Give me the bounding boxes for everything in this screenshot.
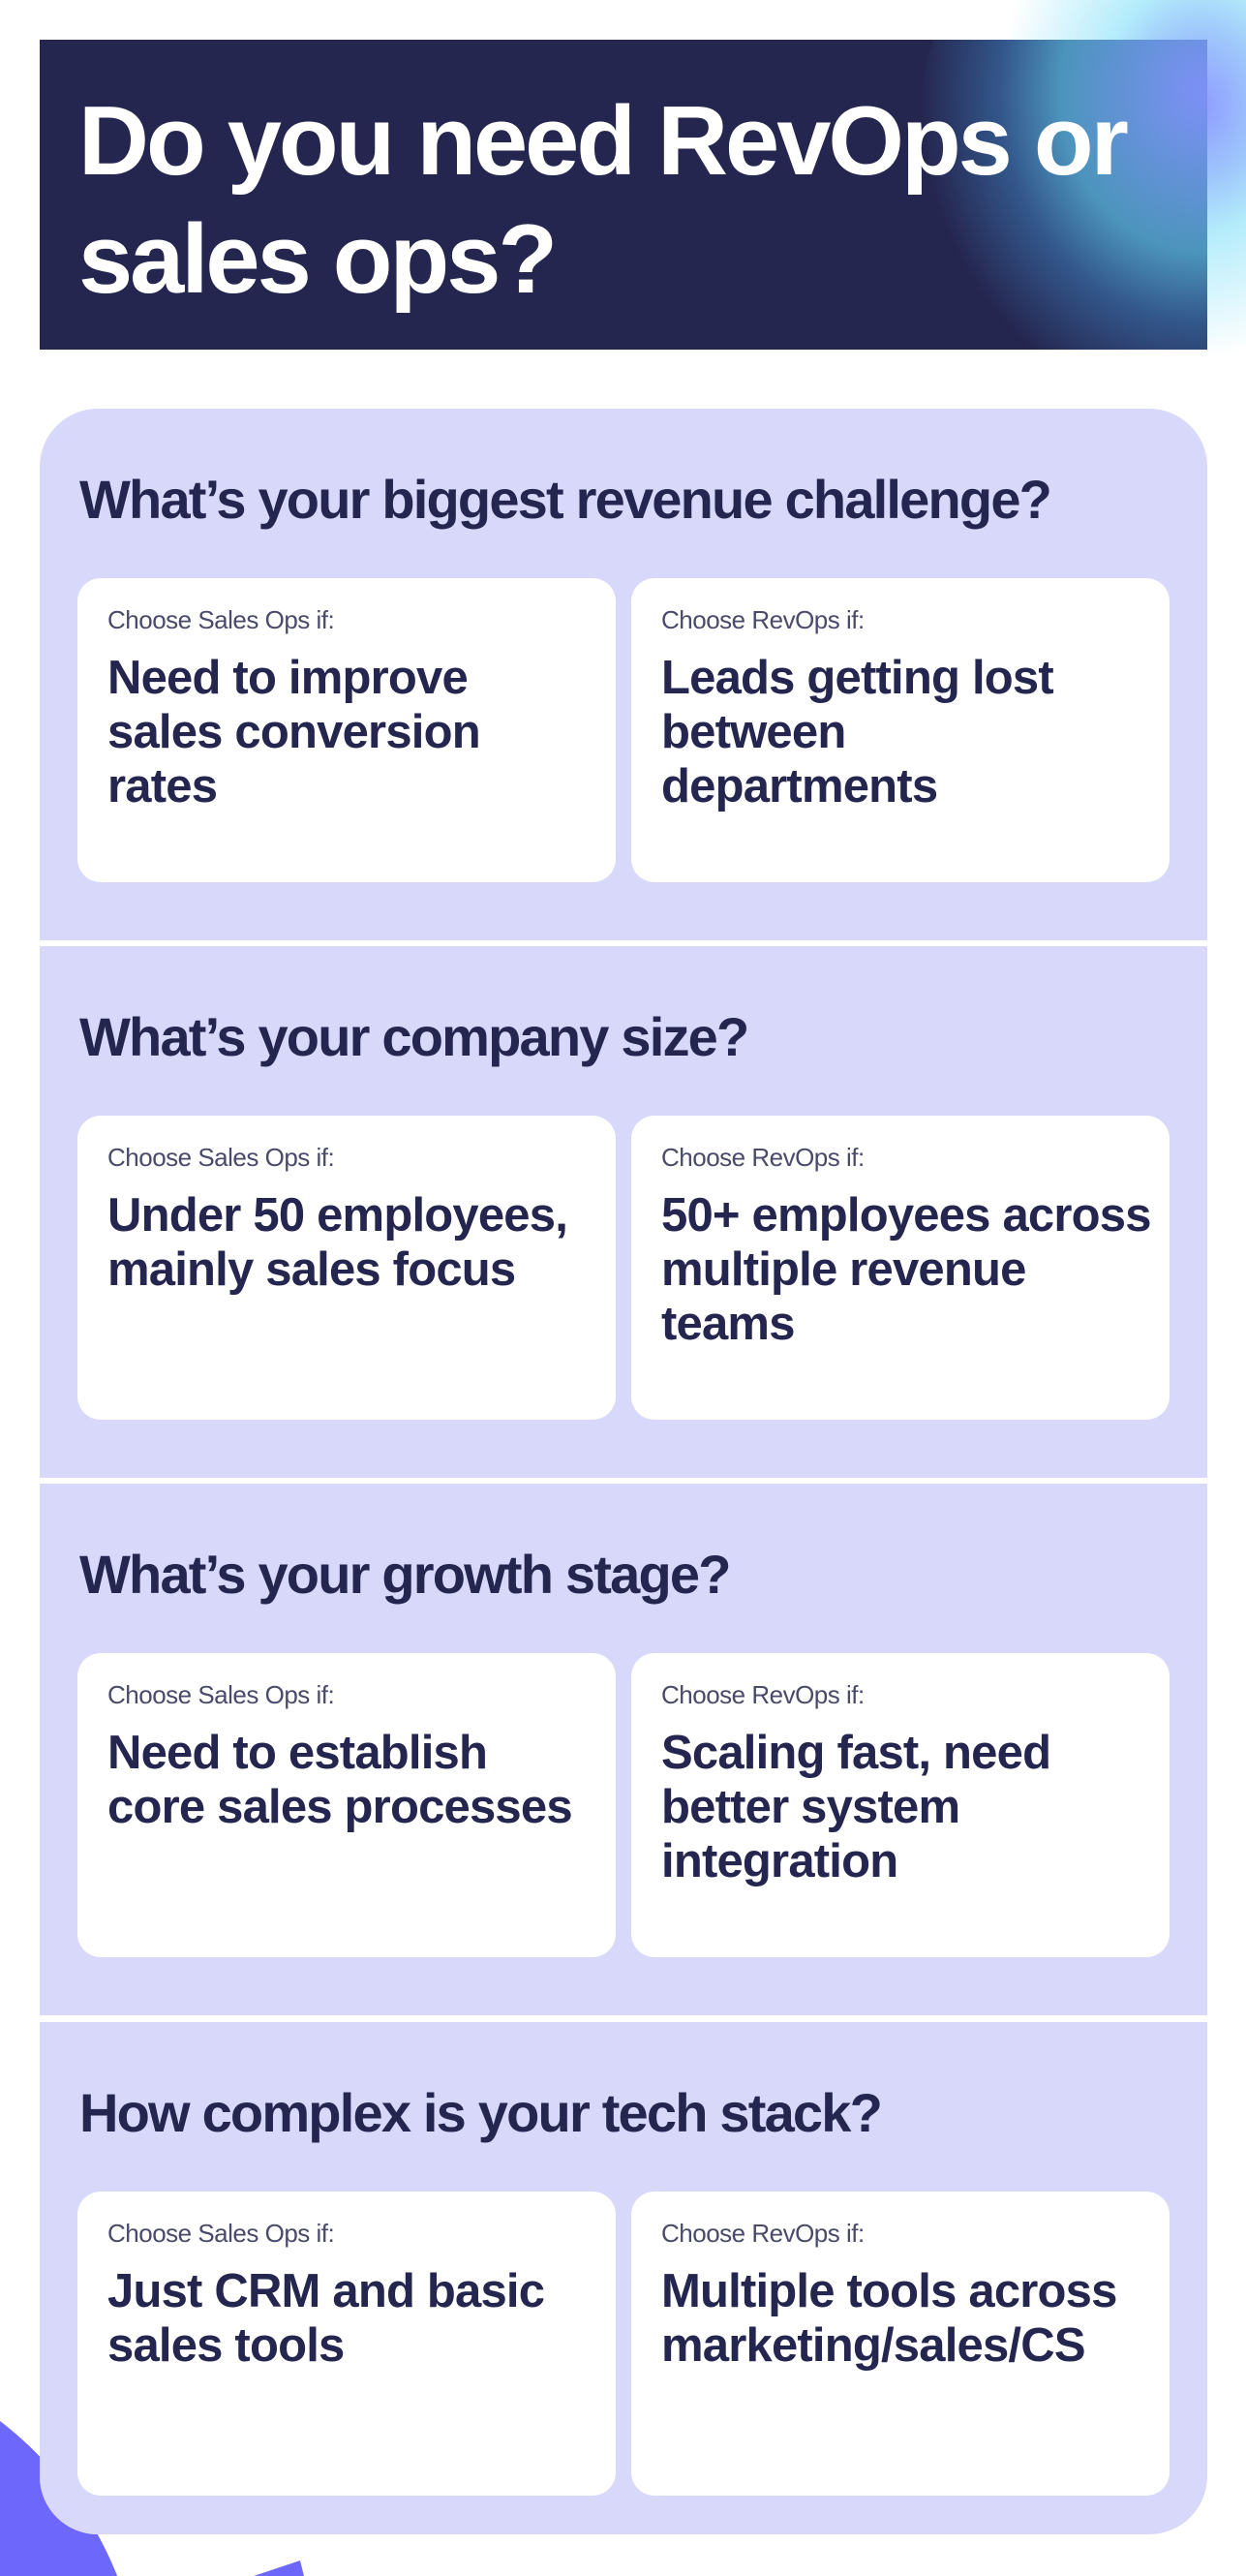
card: sales ops: sales tools [107, 2319, 344, 2372]
card: revops: 50+ employees across [661, 1189, 1151, 1242]
card: revops [631, 1116, 1170, 1420]
card: sales ops: Choose Sales Ops if: [107, 605, 334, 634]
card: sales ops: Need to improve [107, 652, 468, 704]
heading: What’s your growth stage? [79, 1544, 730, 1605]
card: sales ops: rates [107, 760, 217, 813]
card: revops: Leads getting lost [661, 652, 1053, 704]
card: revops: Choose RevOps if: [661, 1143, 865, 1172]
card: sales ops: Choose Sales Ops if: [107, 1680, 334, 1709]
card: revops [631, 578, 1170, 882]
section: tech stack [40, 2022, 1207, 2534]
card: revops: Choose RevOps if: [661, 605, 865, 634]
card: revops: departments [661, 760, 937, 813]
card: revops: marketing/sales/CS [661, 2319, 1085, 2372]
card: sales ops [77, 2192, 616, 2496]
card: sales ops: Choose Sales Ops if: [107, 2219, 334, 2248]
card: sales ops [77, 1653, 616, 1957]
card: sales ops: Just CRM and basic [107, 2265, 544, 2317]
card: sales ops: sales conversion [107, 706, 480, 758]
card: revops: Choose RevOps if: [661, 2219, 865, 2248]
card: revops [631, 1653, 1170, 1957]
card: revops: Choose RevOps if: [661, 1680, 865, 1709]
card: revops: better system [661, 1781, 959, 1833]
decorative glow top-right [997, 0, 1246, 358]
card: revops [631, 2192, 1170, 2496]
card: revops: integration [661, 1835, 897, 1887]
card: sales ops: core sales processes [107, 1781, 572, 1833]
title: Do you need RevOps or sales ops? [78, 87, 1126, 314]
card: revops: multiple revenue [661, 1243, 1026, 1296]
decorative purple blob bottom-left [0, 2421, 304, 2576]
heading: How complex is your tech stack? [79, 2082, 881, 2143]
panel: questions [40, 409, 1207, 2534]
card: revops: between [661, 706, 845, 758]
heading: What’s your company size? [79, 1006, 747, 1067]
section: growth stage [40, 1484, 1207, 2015]
card: sales ops: Under 50 employees, [107, 1189, 567, 1242]
card: sales ops [77, 578, 616, 882]
card: sales ops [77, 1116, 616, 1420]
card: sales ops: Need to establish [107, 1727, 487, 1779]
section: company size [40, 946, 1207, 1478]
heading: What’s your biggest revenue challenge? [79, 469, 1050, 530]
title [40, 40, 1207, 350]
section: revenue challenge [40, 409, 1207, 940]
card: sales ops: Choose Sales Ops if: [107, 1143, 334, 1172]
card: revops: Multiple tools across [661, 2265, 1117, 2317]
card: revops: Scaling fast, need [661, 1727, 1050, 1779]
card: sales ops: mainly sales focus [107, 1243, 515, 1296]
card: revops: teams [661, 1298, 795, 1350]
